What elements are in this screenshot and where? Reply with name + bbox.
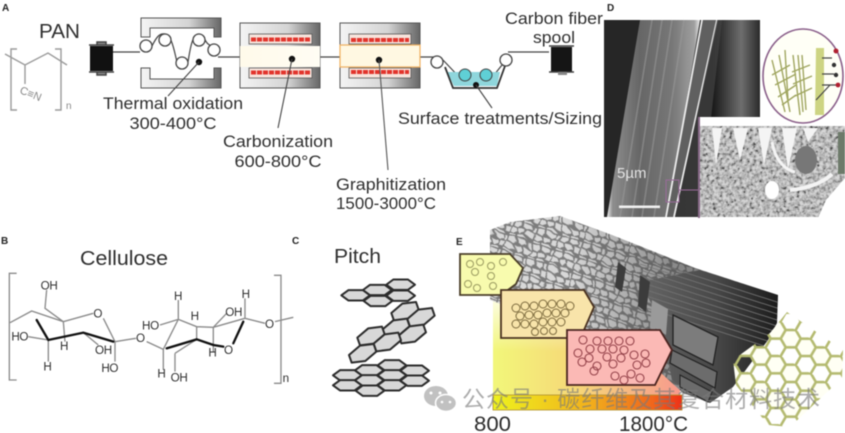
cellulose molecular structure: OH	[225, 306, 242, 319]
fiber path	[113, 34, 549, 80]
cellulose molecular structure: O	[265, 318, 274, 331]
cellulose molecular structure: H	[242, 288, 250, 301]
cellulose molecular structure: HO	[11, 331, 28, 344]
cellulose molecular structure: HO	[142, 319, 159, 332]
cellulose molecular structure: n	[283, 372, 289, 385]
label: carbonization	[223, 132, 333, 171]
heading Pitch: Pitch	[334, 246, 381, 268]
callout: high-temperature graphitic structure	[567, 330, 672, 385]
graphene honeycomb sheet	[733, 312, 843, 427]
temperature gradient field	[493, 295, 680, 397]
label: graphitization	[336, 175, 446, 213]
cellulose molecular structure: O	[224, 344, 233, 357]
label: carbon fiber spool: Carbon fiber	[505, 9, 603, 28]
label: thermal oxidation	[103, 94, 243, 133]
temperature bar	[493, 395, 682, 410]
cellulose molecular structure: HO	[101, 362, 118, 375]
cellulose molecular structure	[9, 273, 293, 385]
label: thermal oxidation: 300-400°C	[130, 114, 216, 133]
cellulose molecular structure: O	[136, 332, 145, 345]
callout: amorphous low-temperature structure	[460, 254, 523, 295]
cellulose molecular structure: H	[157, 368, 165, 381]
PAN chemical structure	[5, 49, 72, 112]
label: carbon fiber spool	[505, 9, 603, 47]
cellulose molecular structure: O	[93, 308, 102, 321]
cellulose molecular structure: H	[191, 310, 199, 323]
cellulose molecular structure: H	[174, 290, 182, 303]
label: carbonization: 600-800°C	[234, 152, 322, 171]
heading Cellulose: Cellulose	[80, 248, 168, 270]
icon: chat bubbles	[424, 386, 456, 412]
oven: thermal oxidation	[140, 18, 221, 96]
label: carbonization: Carbonization	[223, 132, 333, 151]
oven: graphitization	[340, 23, 420, 170]
watermark text: 公众号 · 碳纤维及其复合材料技术	[462, 386, 820, 412]
surface treatment bath	[431, 54, 512, 108]
panel E: carbon structure	[456, 205, 843, 433]
SEM image of fiber	[604, 20, 760, 217]
pitch aromatic sheets	[333, 279, 435, 396]
label: thermal oxidation: Thermal oxidation	[103, 94, 243, 113]
PAN chemical structure: C≡N	[18, 85, 43, 104]
label B: B	[1, 236, 8, 247]
PAN chemical structure: n	[66, 101, 72, 112]
cellulose molecular structure: H	[208, 347, 216, 360]
label C: C	[292, 236, 299, 247]
label: carbon fiber spool: spool	[533, 28, 575, 47]
watermark	[424, 386, 820, 412]
heading PAN: PAN	[39, 21, 80, 43]
cellulose molecular structure: OH	[171, 372, 187, 385]
panel B: cellulose	[1, 236, 293, 385]
callout: intermediate turbostratic structure	[501, 290, 594, 338]
3D carbon block	[489, 215, 779, 404]
label E: E	[456, 237, 463, 248]
cellulose molecular structure: OH	[41, 279, 57, 292]
scale label: 5µm	[617, 165, 646, 182]
cellulose molecular structure: H	[43, 361, 51, 374]
label: graphitization: Graphitization	[336, 175, 446, 194]
panel A: PAN process line	[2, 3, 603, 213]
label D: D	[607, 3, 614, 14]
panel C: pitch	[292, 236, 435, 396]
icon: carbon fiber spool	[549, 46, 574, 75]
panel D: microscopy	[604, 3, 845, 218]
icon: PAN spool	[89, 42, 114, 75]
magnified circle: surface chemistry	[763, 29, 843, 123]
inset: fiber cross-section	[698, 117, 845, 218]
scale bar	[619, 206, 660, 208]
oven: carbonization	[240, 23, 320, 128]
label A: A	[2, 3, 9, 14]
label: surface treatments: Surface treatments/Sizing	[398, 109, 602, 128]
cellulose molecular structure: OH	[95, 344, 112, 357]
cellulose molecular structure: H	[60, 340, 68, 353]
label: graphitization: 1500-3000°C	[336, 194, 436, 213]
